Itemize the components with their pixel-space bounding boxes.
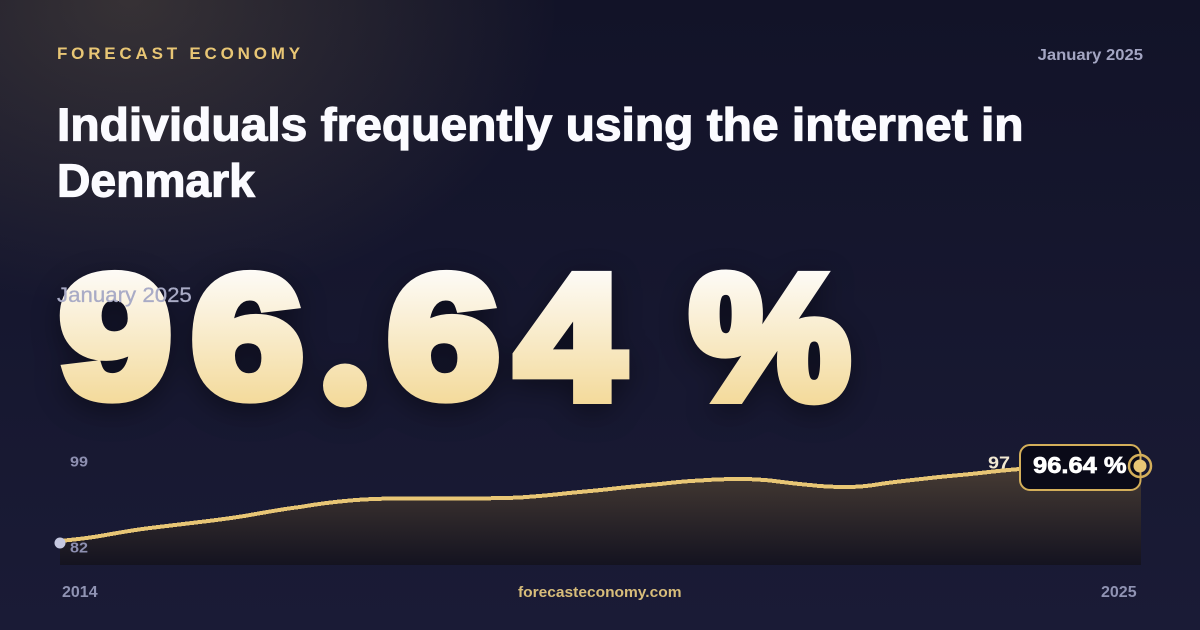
big value (60, 239, 850, 436)
date overlay: January 2025 (57, 283, 192, 307)
title: Individuals frequently using the internet in (57, 98, 1024, 150)
big value: % (690, 239, 850, 436)
value callout: 96.64 % (1033, 453, 1127, 479)
axis min label: 82 (70, 540, 88, 556)
title (57, 98, 1024, 206)
axis max label: 99 (70, 454, 88, 470)
source url: forecasteconomy.com (518, 584, 681, 601)
chart area fill (60, 466, 1141, 565)
end marker (1129, 455, 1151, 477)
chart line (60, 469, 1020, 541)
big value: 6 (192, 240, 303, 433)
title: Denmark (57, 155, 255, 206)
rounded value label: 97 (988, 453, 1010, 473)
big value: 6 (388, 240, 499, 433)
brand label: FORECAST ECONOMY (57, 44, 304, 63)
area chart (54, 445, 1151, 565)
header date: January 2025 (1038, 46, 1143, 64)
value callout (1020, 445, 1140, 490)
big value: . (328, 286, 362, 420)
big value: 9 (60, 240, 171, 433)
start year: 2014 (62, 584, 98, 601)
end year: 2025 (1101, 584, 1137, 601)
start point (54, 538, 66, 548)
big value: 4 (516, 240, 624, 436)
